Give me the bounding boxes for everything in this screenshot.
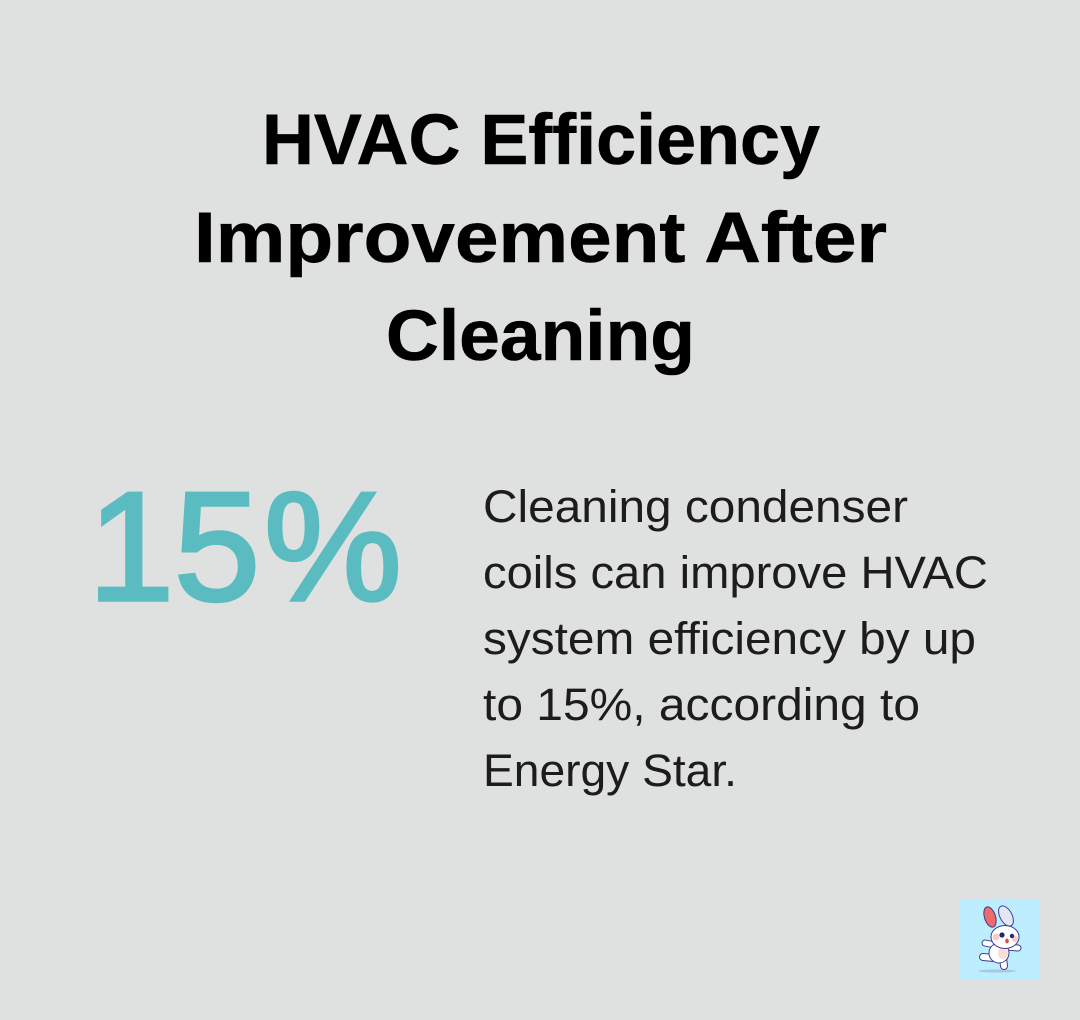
description text: system efficiency by up [483, 613, 976, 664]
body [989, 943, 1009, 963]
description text: Energy Star. [483, 745, 737, 796]
head [991, 926, 1019, 948]
arms [985, 943, 1018, 948]
description text [483, 481, 988, 796]
title: Cleaning [386, 297, 695, 376]
right ear [996, 903, 1016, 929]
description text: coils can improve HVAC [483, 547, 988, 598]
description text: Cleaning condenser [483, 481, 908, 532]
big stat: 15%: 15% [88, 460, 402, 633]
left ear [982, 905, 998, 929]
title: Improvement After [194, 199, 887, 278]
title [194, 101, 887, 376]
title: HVAC Efficiency [262, 101, 821, 180]
description text: to 15%, according to [483, 679, 920, 730]
icon: rabbit logo [960, 899, 1040, 979]
legs [983, 957, 1004, 966]
